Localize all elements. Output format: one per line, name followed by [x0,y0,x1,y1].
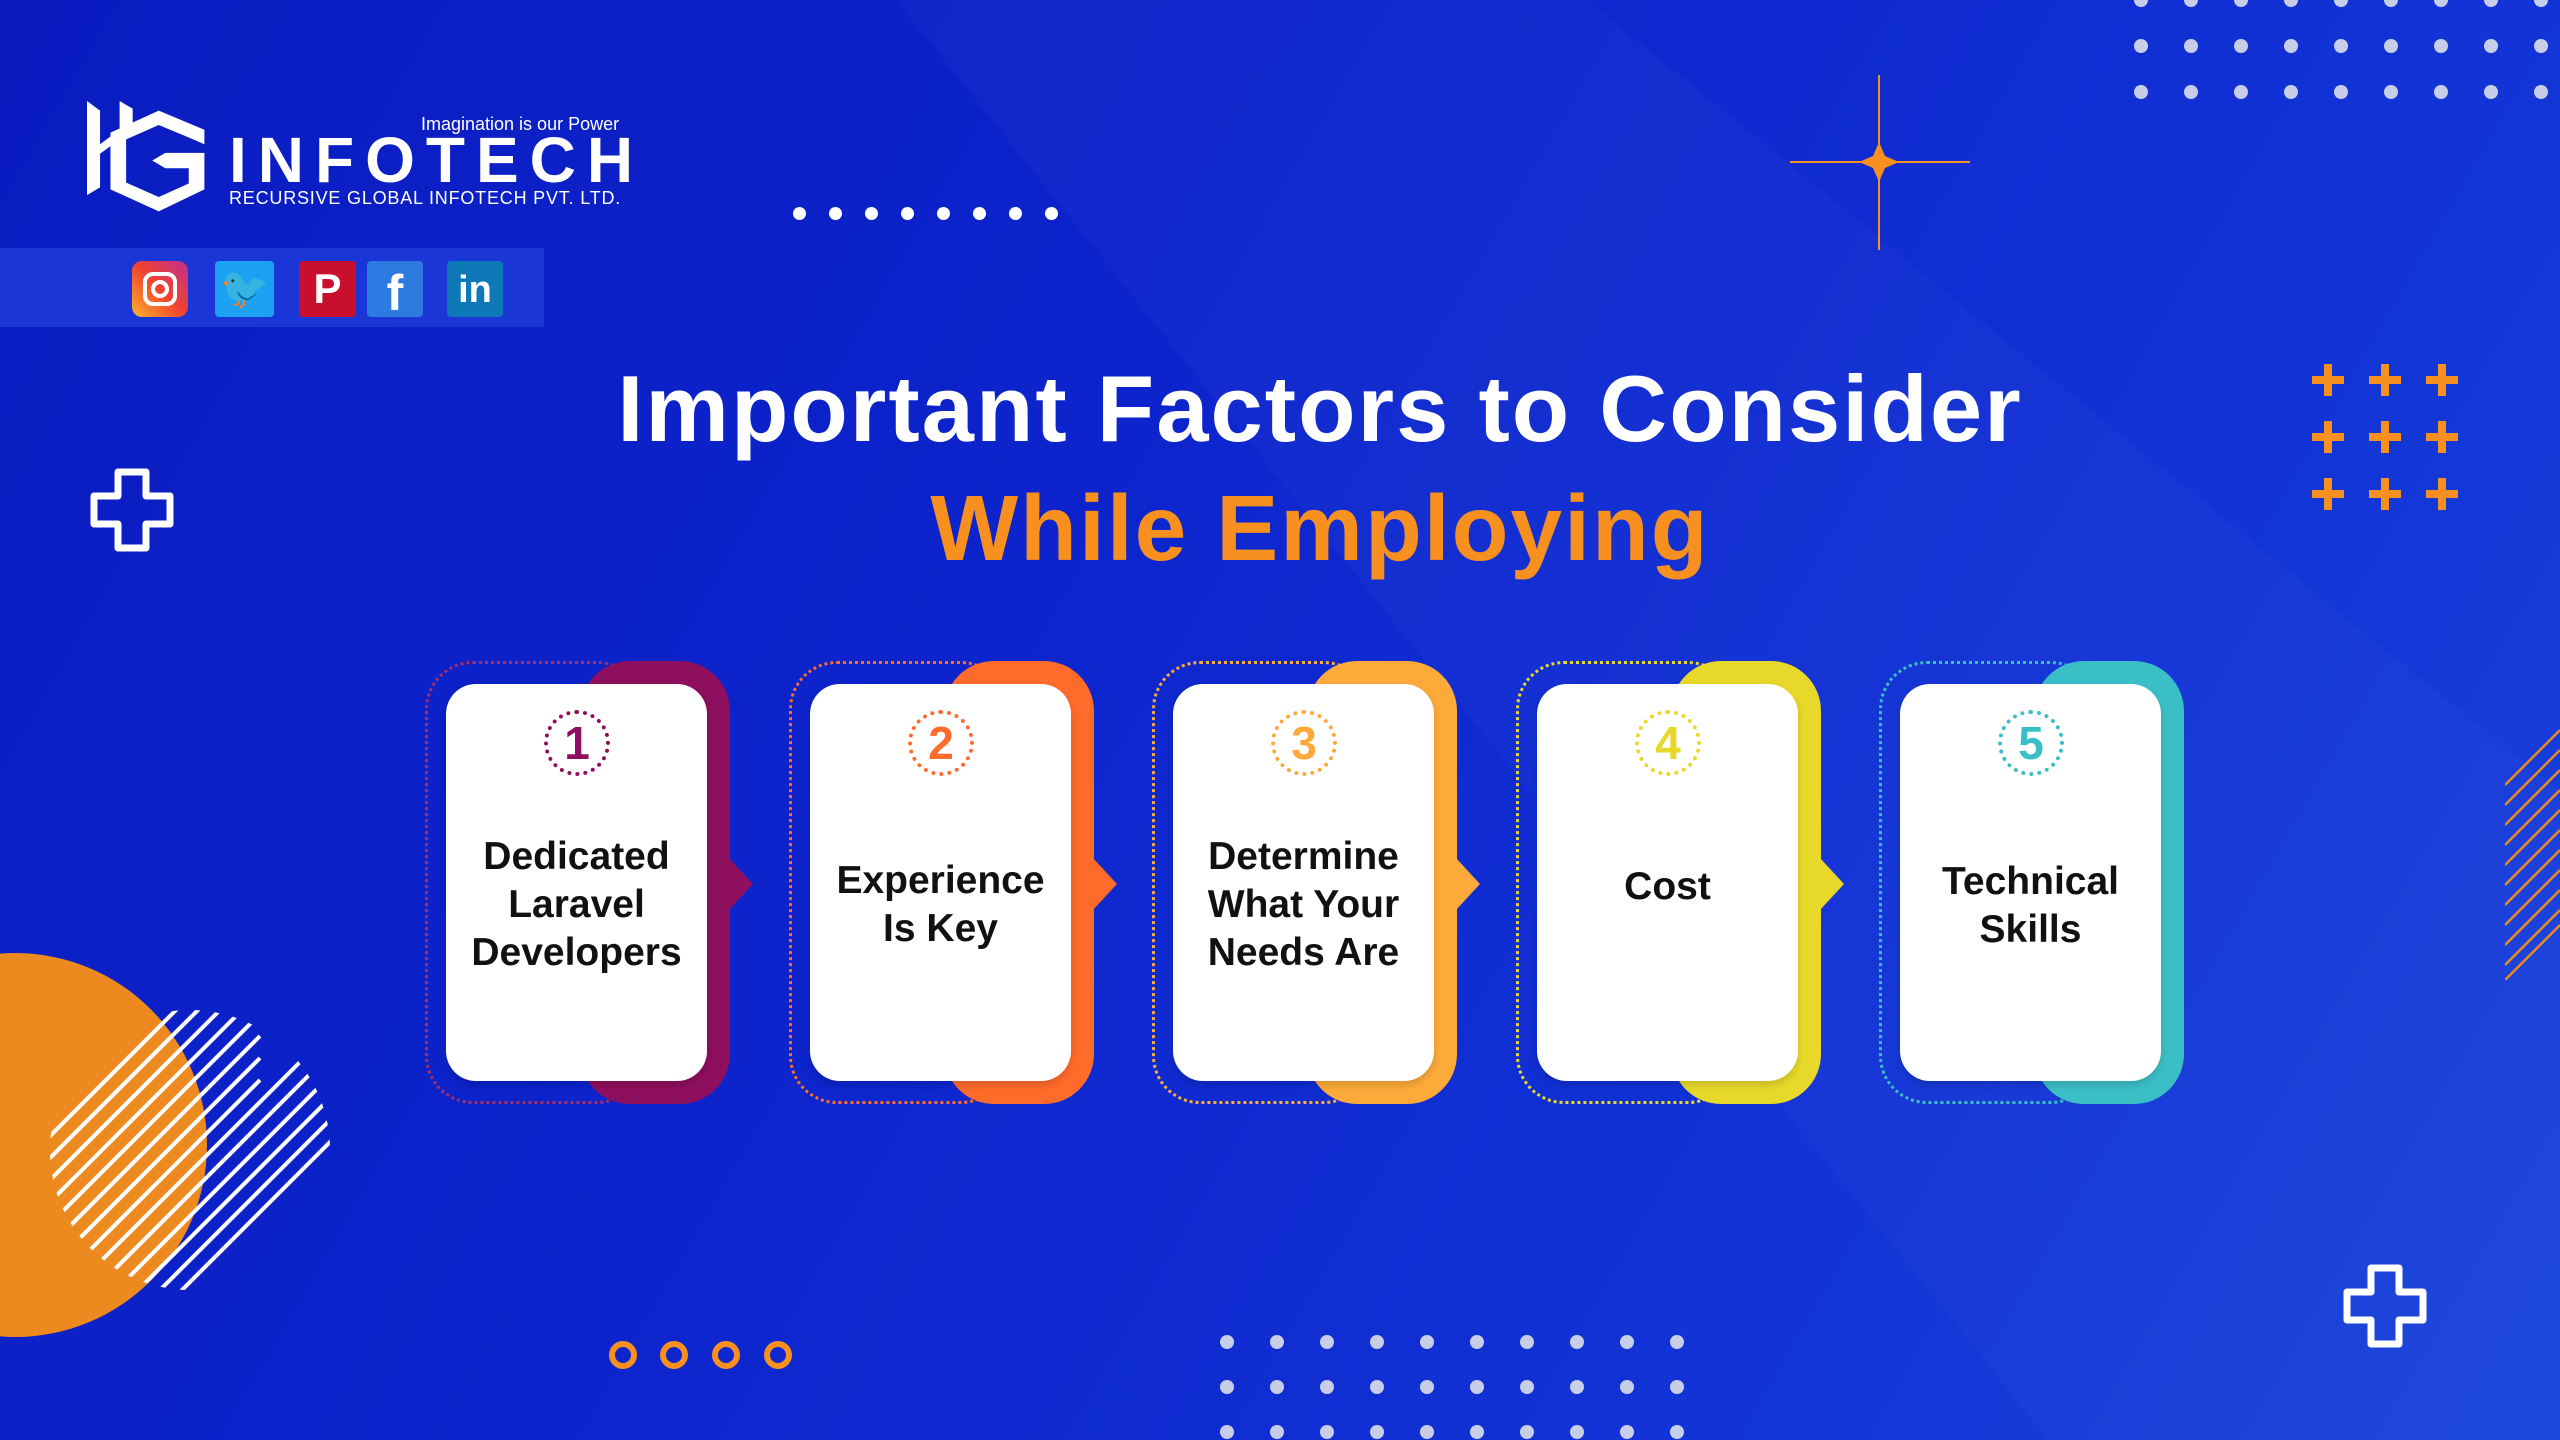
icon: pinterest: P [313,265,342,312]
title line 2: While Employing [930,476,1710,580]
icon: pinterest [299,261,356,317]
text: Experience Is Key [836,859,1045,950]
card 3 [1152,661,1480,1104]
orange half circle with hatch [0,953,330,1337]
text: Dedicated Laravel Developers: Laravel [508,883,645,926]
icon: twitter: 🐦 [220,267,269,311]
tagline: Imagination is our Power [421,114,619,134]
card 4 [1516,661,1844,1104]
number 1 [544,710,610,776]
text: Dedicated Laravel Developers: Dedicated [483,835,670,878]
orange rings bottom [609,1341,792,1369]
orange plus grid [2312,364,2458,510]
text: Technical Skills: Technical [1942,860,2119,903]
icon: white plus outline left [90,468,174,552]
decorative dots top [793,207,1058,220]
text: Determine What Your Needs Are: Needs Are [1208,931,1399,974]
text: Determine What Your Needs Are: Determine [1208,835,1399,878]
text: Technical Skills [1942,860,2119,951]
number 1: 1 [564,717,590,769]
text: Technical Skills: Skills [1980,908,2081,951]
card 5 [1879,661,2184,1104]
text: Dedicated Laravel Developers [471,835,682,974]
card 2 [789,661,1117,1104]
text: Dedicated Laravel Developers: Developers [471,931,682,974]
text: Determine What Your Needs Are: What Your [1208,883,1399,926]
dot grid top right [2134,0,2548,99]
icon: RG mark [87,101,204,212]
text: Experience Is Key: Experience [836,859,1045,902]
text: Cost: Cost [1624,865,1711,908]
text: Determine What Your Needs Are [1208,835,1399,974]
icon: white plus outline right [2344,1264,2426,1348]
text: Experience Is Key: Is Key [883,907,998,950]
number 4: 4 [1655,717,1681,769]
title line 1: Important Factors to Consider [617,356,2023,461]
right edge hatch [2505,729,2560,980]
brand name: INFOTECH [229,124,644,196]
card 1 [425,661,753,1104]
icon: linkedin: in [458,269,492,311]
number 3: 3 [1291,717,1317,769]
title [617,356,2023,580]
number 2 [908,710,974,776]
icon: facebook: f [387,265,403,321]
icon: twitter [215,261,274,317]
logo [87,101,644,212]
grey dot grid bottom [1220,1335,1684,1439]
number 2: 2 [928,717,954,769]
number 5: 5 [2018,717,2044,769]
number 4 [1635,710,1701,776]
icon: linkedin [447,261,503,317]
social band [0,248,544,327]
number 3 [1271,710,1337,776]
number 5 [1998,710,2064,776]
icon: facebook [367,261,423,317]
company subtitle: RECURSIVE GLOBAL INFOTECH PVT. LTD. [229,188,621,208]
icon: instagram [132,261,188,317]
icon: orange sparkle star [1790,75,1970,250]
